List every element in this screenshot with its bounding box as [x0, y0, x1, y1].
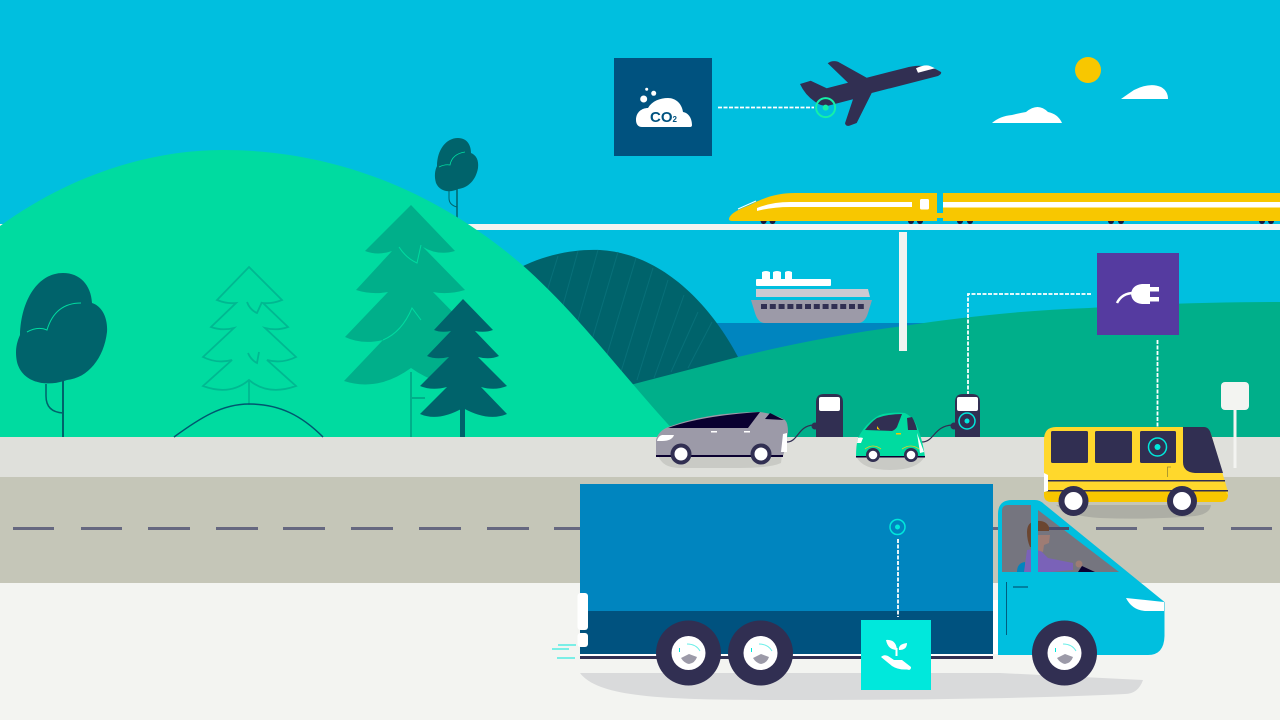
road dashes [13, 527, 1272, 530]
dashed connector: plug to bus [1156, 340, 1158, 433]
tree: left round tree [16, 273, 107, 437]
dashed connector: truck to plant panel [897, 539, 899, 617]
road sign [1221, 382, 1249, 468]
cruise ship [751, 271, 872, 323]
charging station 2 [950, 394, 980, 437]
cloud left [992, 107, 1062, 123]
small tree on hilltop [435, 138, 478, 222]
dashed connector: plug to charger [968, 294, 1091, 397]
yellow bus [1044, 427, 1228, 519]
driver cab [998, 500, 1164, 655]
hill arc line [174, 404, 323, 437]
charging station 1 [812, 394, 843, 437]
ground bands [0, 437, 1280, 720]
airplane [800, 61, 941, 126]
bullet train [729, 193, 1280, 224]
sun [1075, 57, 1101, 83]
icon: plug [1117, 284, 1159, 304]
tree: outlined pine [203, 267, 296, 405]
wheels [656, 620, 1097, 686]
speed lines [552, 645, 576, 658]
main green hill [0, 150, 680, 437]
charging icon panel [1097, 253, 1179, 335]
delivery truck [552, 484, 1164, 686]
dashed connector: CO2 to plane [718, 106, 814, 108]
plant icon panel [861, 620, 931, 690]
icon: CO2 cloud: CO2 [650, 109, 678, 126]
cargo box [578, 484, 998, 659]
CO2 icon panel [614, 58, 712, 156]
target marker on truck [890, 520, 905, 534]
dark hatched hill [515, 250, 738, 392]
target marker on bus [1148, 438, 1166, 456]
elevated rail [0, 224, 1280, 351]
grey electric car [656, 412, 813, 468]
truck shadow [580, 673, 1143, 700]
tree: large filled pine [344, 205, 478, 437]
cloud right [1121, 85, 1168, 99]
target marker on plane [816, 98, 835, 117]
green electric car [856, 413, 952, 470]
driver [1017, 521, 1095, 572]
back green hill [630, 302, 1280, 440]
water [690, 323, 990, 393]
icon: plant in hand [881, 640, 911, 670]
tree: dark pine [420, 299, 507, 437]
